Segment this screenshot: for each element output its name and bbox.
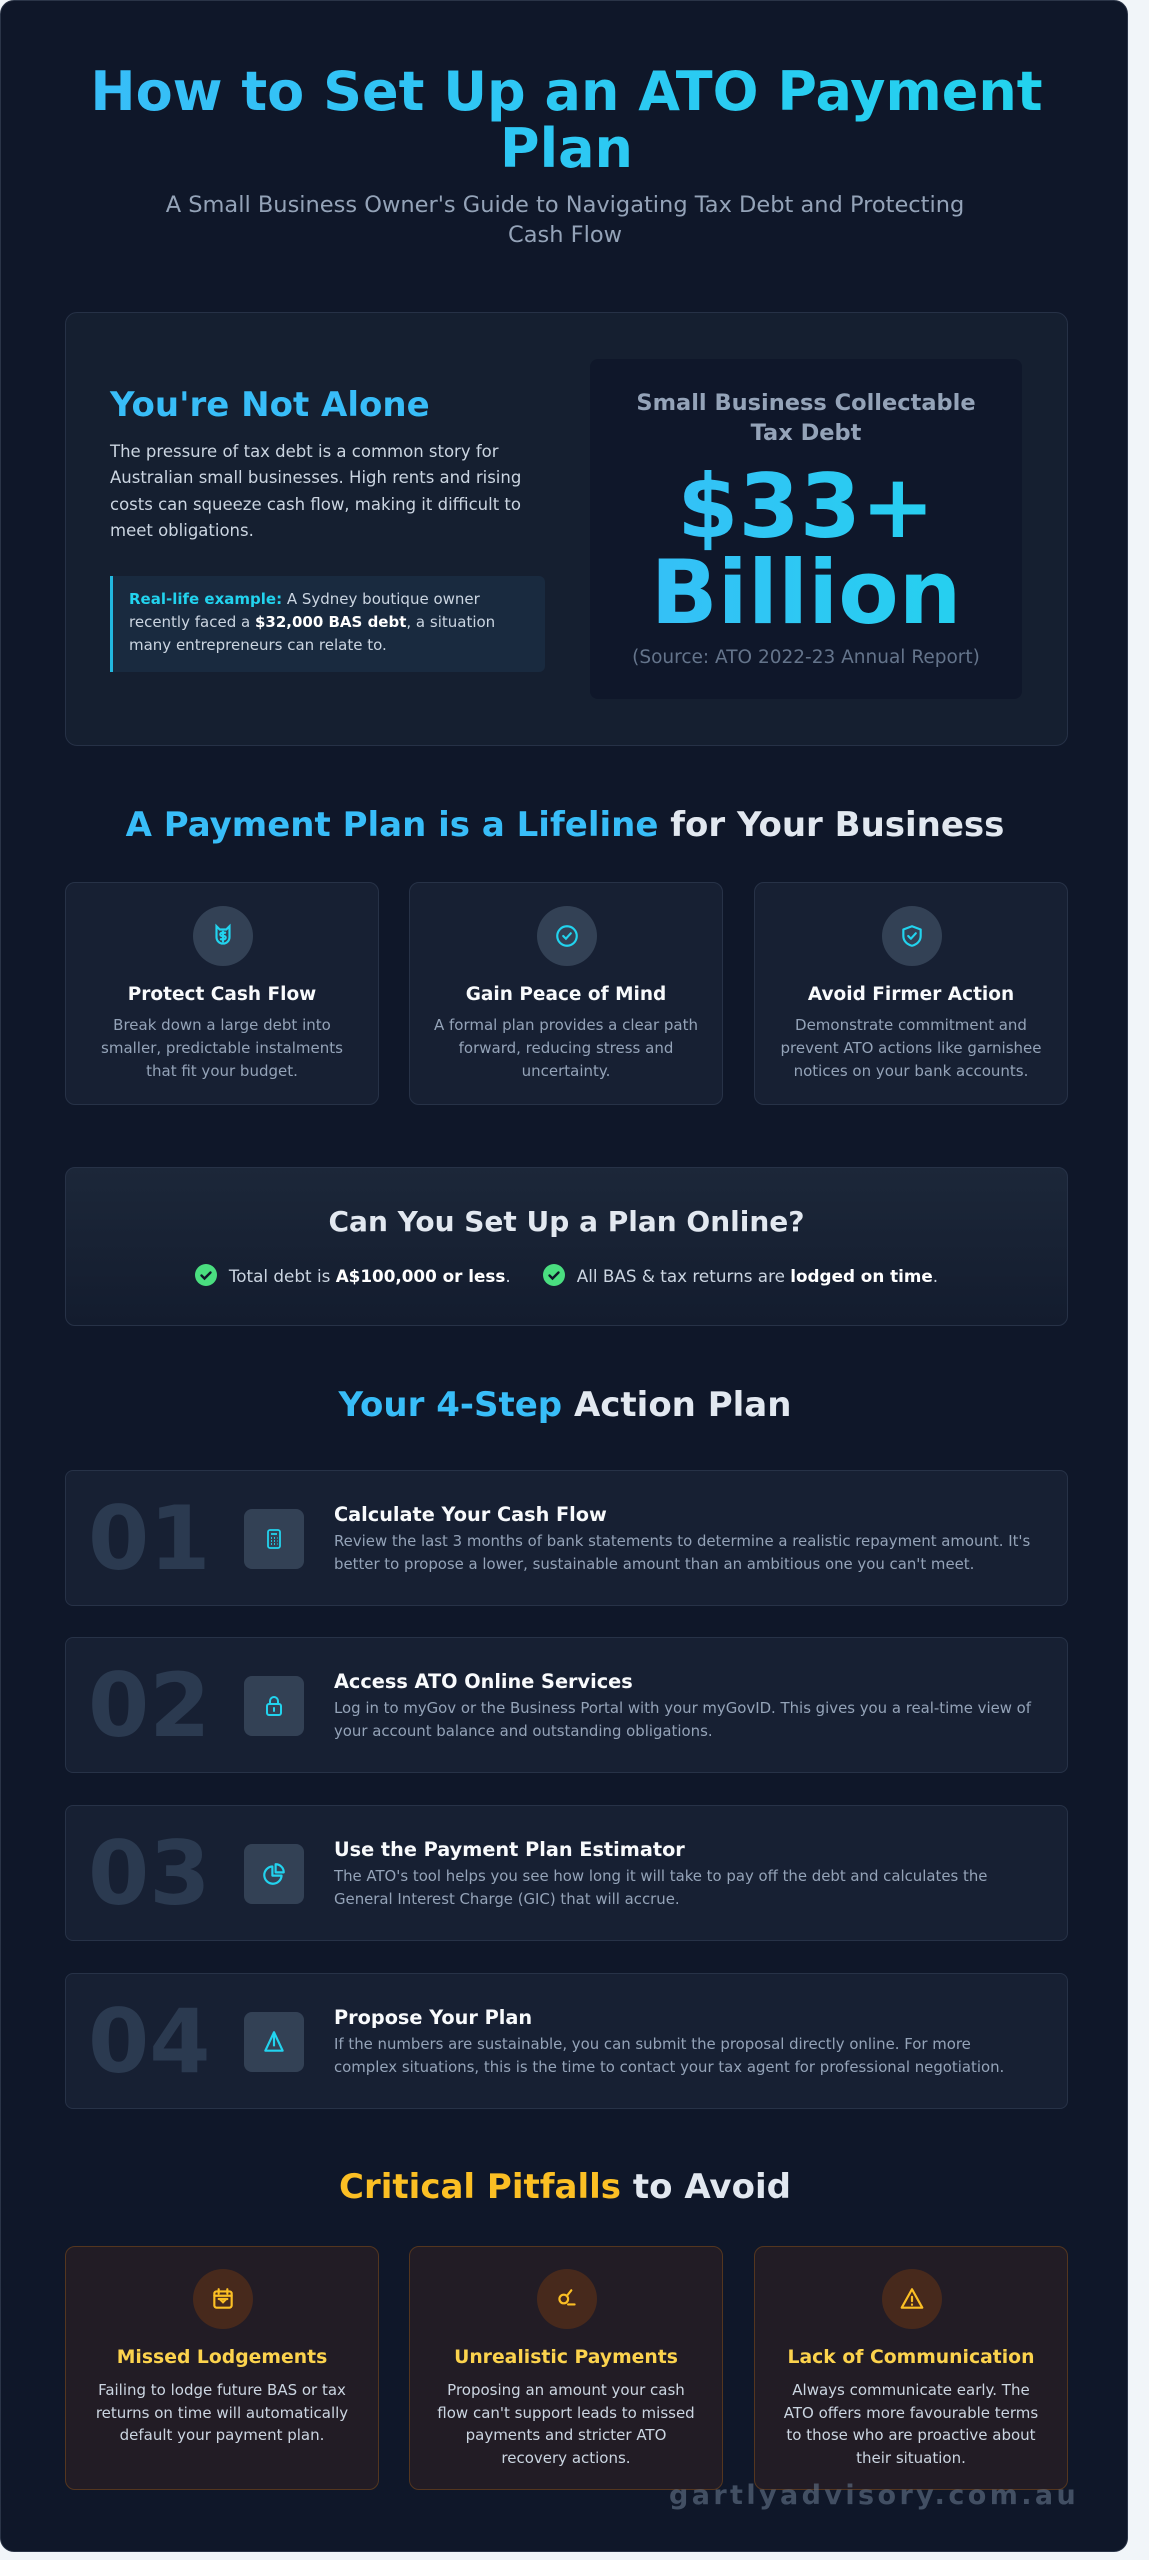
- panel: pitfall lack of communication: [754, 2246, 1068, 2490]
- step 04: [65, 1973, 1068, 2109]
- step 03: Use the Payment Plan Estimator: [334, 1838, 685, 1861]
- heading: pitfalls: Critical Pitfalls to Avoid: [339, 2167, 791, 2207]
- panel: online eligibility: [65, 1167, 1068, 1326]
- step 01: Review the last 3 months of bank statements to determine a realistic repayment amount. It's better to propose a lower, sustainable amount than an ambitious one you can't meet.: [334, 1532, 1030, 1573]
- step 02: [65, 1637, 1068, 1773]
- panel: pitfall missed lodgements: Missed Lodgements: [117, 2347, 327, 2368]
- panel: benefit avoid firmer action: Avoid Firmer Action: [808, 984, 1014, 1005]
- panel: benefit protect cash flow: Protect Cash Flow: [128, 984, 316, 1005]
- step 04: If the numbers are sustainable, you can submit the proposal directly online. For more complex situations, this is the time to contact your tax agent for professional negotiation.: [334, 2035, 1004, 2076]
- panel: pitfall lack of communication: Always communicate early. The ATO offers more favourable terms to those who are proactive about their situation.: [784, 2381, 1038, 2467]
- step 04: 04: [88, 1990, 210, 2093]
- icon: money hand: [193, 906, 253, 966]
- step 02: Log in to myGov or the Business Portal with your myGovID. This gives you a real-time view of your account balance and outstanding obligations.: [334, 1699, 1031, 1740]
- stat label: Tax Debt: [751, 420, 861, 446]
- heading: you're not alone: You're Not Alone: [110, 385, 430, 425]
- step 02: 02: [88, 1654, 210, 1757]
- stat number: Billion: [651, 541, 961, 644]
- step 03: [65, 1805, 1068, 1941]
- step 03: The ATO's tool helps you see how long it will take to pay off the debt and calculates the General Interest Charge (GIC) that will accrue.: [334, 1867, 987, 1908]
- icon: check circle: [537, 906, 597, 966]
- step 01: [65, 1470, 1068, 1606]
- panel: benefit protect cash flow: Break down a large debt into smaller, predictable instalments that fit your budget.: [101, 1016, 343, 1080]
- step 01: Calculate Your Cash Flow: [334, 1503, 607, 1526]
- panel: benefit peace of mind: A formal plan provides a clear path forward, reducing stress and uncertainty.: [434, 1016, 698, 1080]
- step 03: 03: [88, 1822, 210, 1925]
- panel: pitfall unrealistic payments: Unrealistic Payments: [454, 2347, 678, 2368]
- stat label: Small Business Collectable: [636, 390, 976, 416]
- watermark: gartlyadvisory.com.au: [669, 2480, 1079, 2511]
- callout: real-life example: [110, 576, 545, 672]
- panel: benefit avoid firmer action: [754, 882, 1068, 1105]
- panel: benefit peace of mind: [409, 882, 723, 1105]
- stat box: tax debt: [590, 359, 1022, 699]
- panel: you're not alone: [65, 312, 1068, 746]
- checklist: Total debt is A$100,000 or less. All BAS & tax returns are lodged on time.: [229, 1266, 938, 1286]
- icon: shield check: [882, 906, 942, 966]
- panel: pitfall missed lodgements: [65, 2246, 379, 2490]
- stat number: [590, 464, 1022, 636]
- heading: action plan: Your 4-Step Action Plan: [339, 1385, 791, 1425]
- icon: pie chart: [244, 1844, 304, 1904]
- panel: pitfall unrealistic payments: [409, 2246, 723, 2490]
- heading: can you set up online: Can You Set Up a Plan Online?: [328, 1205, 804, 1238]
- icon: calculator: [244, 1509, 304, 1569]
- panel: pitfall lack of communication: Lack of Communication: [788, 2347, 1034, 2368]
- step 01: 01: [88, 1487, 210, 1590]
- icon: coin: [537, 2269, 597, 2329]
- icon: lock: [244, 1676, 304, 1736]
- stat label: [636, 390, 976, 446]
- panel: benefit peace of mind: Gain Peace of Mind: [466, 984, 666, 1005]
- panel: pitfall unrealistic payments: Proposing an amount your cash flow can't support leads to missed payments and stricter ATO recovery actions.: [437, 2381, 695, 2467]
- icon: warning: [882, 2269, 942, 2329]
- panel: pitfall missed lodgements: Failing to lodge future BAS or tax returns on time will automatically default your payment plan.: [96, 2381, 348, 2444]
- title: How to Set Up an ATO Payment Plan: [90, 60, 1043, 180]
- stat number: $33+: [677, 455, 935, 558]
- subtitle: A Small Business Owner's Guide to Navigating Tax Debt and Protecting Cash Flow: [166, 192, 964, 248]
- heading: lifeline: A Payment Plan is a Lifeline for Your Business: [126, 805, 1004, 845]
- icon: calendar: [193, 2269, 253, 2329]
- callout: real-life example: Real-life example: A Sydney boutique owner recently faced a $32,000 BAS debt, a situation many entrepreneurs can relate to.: [129, 590, 495, 654]
- step 04: Propose Your Plan: [334, 2006, 532, 2029]
- icon: send: [244, 2012, 304, 2072]
- panel: benefit avoid firmer action: Demonstrate commitment and prevent ATO actions like garnishee notices on your bank accounts.: [780, 1016, 1042, 1080]
- stat source: (Source: ATO 2022-23 Annual Report): [632, 647, 980, 668]
- panel: benefit protect cash flow: [65, 882, 379, 1105]
- text block: intro: The pressure of tax debt is a common story for Australian small businesses. High rents and rising costs can squeeze cash flow, making it difficult to meet obligations.: [110, 442, 521, 540]
- step 02: Access ATO Online Services: [334, 1670, 633, 1693]
